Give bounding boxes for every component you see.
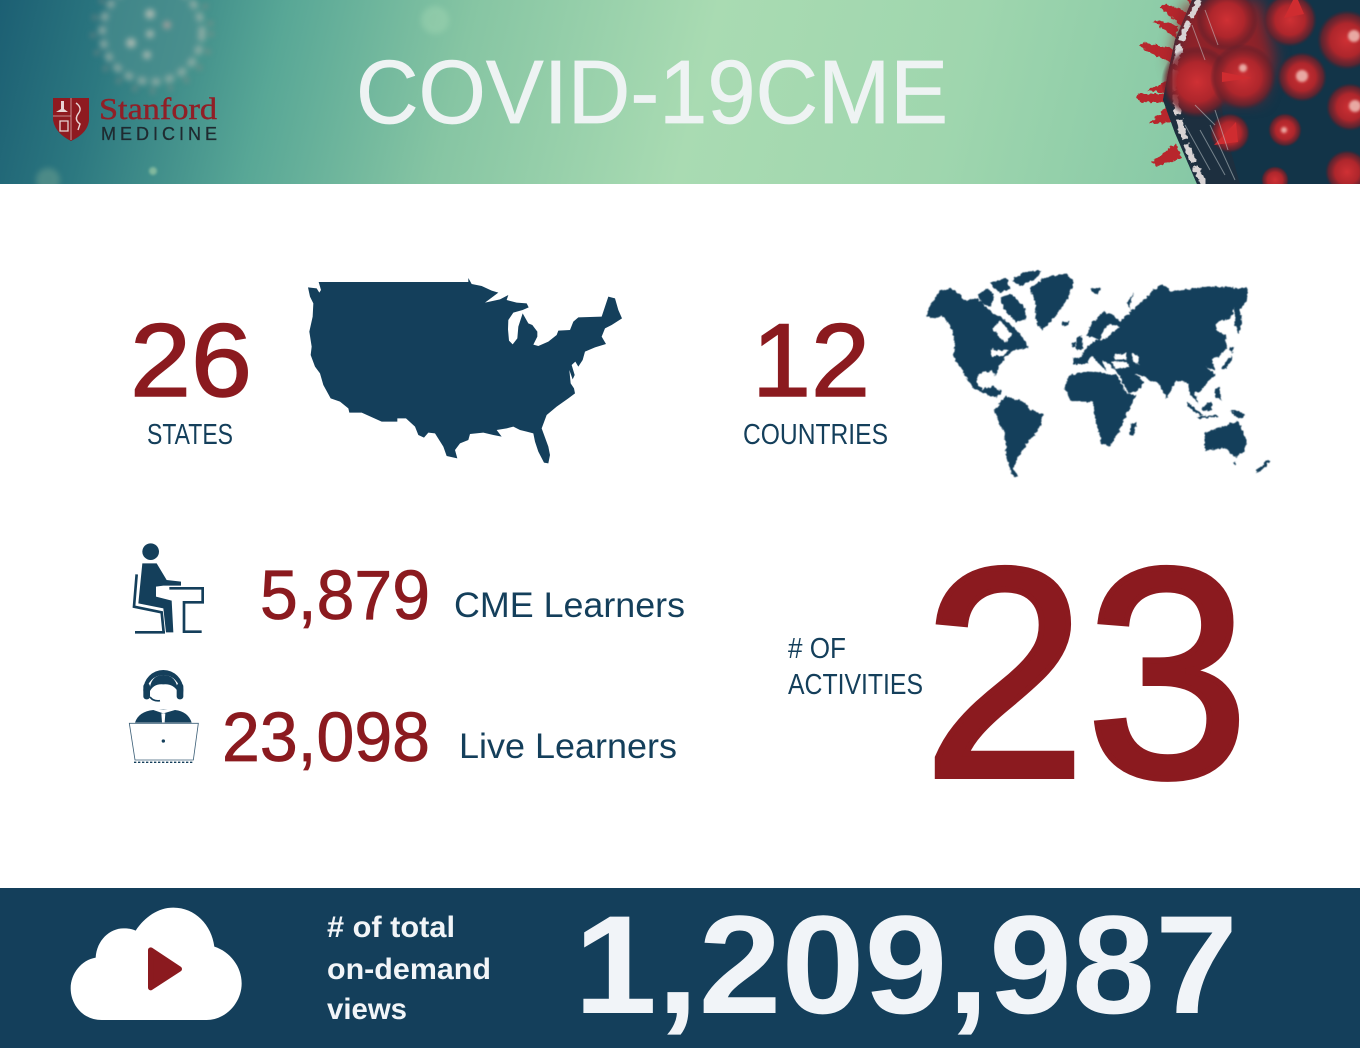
on-demand views label: # of total [327,911,455,944]
Live Learners label: Live Learners [459,727,677,766]
icon: seated learner [134,543,203,632]
Novaya Zemlya [1127,293,1134,310]
title: COVID-19CME [356,43,948,143]
Stanford Medicine logo [53,91,218,144]
26: 26 [130,303,252,419]
red virus, top right [1136,0,1360,194]
header banner [0,0,1360,194]
Baltic and inland seas [1099,325,1119,340]
blurred virus, top left [93,0,211,91]
Australia [1205,422,1247,457]
footer band [0,886,1360,1048]
activities stat [788,507,1249,840]
STATES label: STATES [147,419,233,451]
23,098: 23,098 [222,698,430,776]
icon: US map [308,278,622,463]
# OF ACTIVITIES label: # OF [788,633,846,665]
shield [53,98,89,141]
reddish surface around the upper-left spikes [1172,0,1275,100]
Eurasia [1073,283,1248,404]
Greenland [1030,273,1074,331]
icon: cloud with play button [71,908,242,1020]
Japan [1222,347,1234,368]
12: 12 [752,303,870,419]
1,209,987: 1,209,987 [574,886,1238,1043]
on-demand views label: views [327,993,407,1026]
Madagascar [1129,422,1137,435]
icon: live learner at laptop [129,670,198,762]
COUNTRIES label: COUNTRIES [743,419,888,451]
faint light specks [149,167,157,175]
Africa [1064,372,1137,446]
North America [927,288,1028,397]
Southeast Asia islands [1187,387,1245,418]
Svalbard [1090,287,1101,296]
# OF ACTIVITIES label: ACTIVITIES [788,669,923,701]
23: 23 [923,507,1249,840]
New Zealand and Tasmania [1233,460,1270,473]
wordmark: Stanford [99,91,218,126]
South America [993,396,1044,477]
Stanford Medicine logo: MEDICINE [101,124,217,144]
5,879: 5,879 [260,556,430,634]
states stat [130,303,252,451]
on-demand views label [327,911,491,1026]
on-demand views label: on-demand [327,953,491,986]
British Isles [1072,336,1084,350]
Iceland [1062,322,1069,326]
# OF ACTIVITIES label [788,633,923,701]
icon: world map [927,271,1270,477]
countries stat [743,303,888,451]
Arctic islands [978,271,1042,323]
CME Learners label: CME Learners [454,586,685,625]
